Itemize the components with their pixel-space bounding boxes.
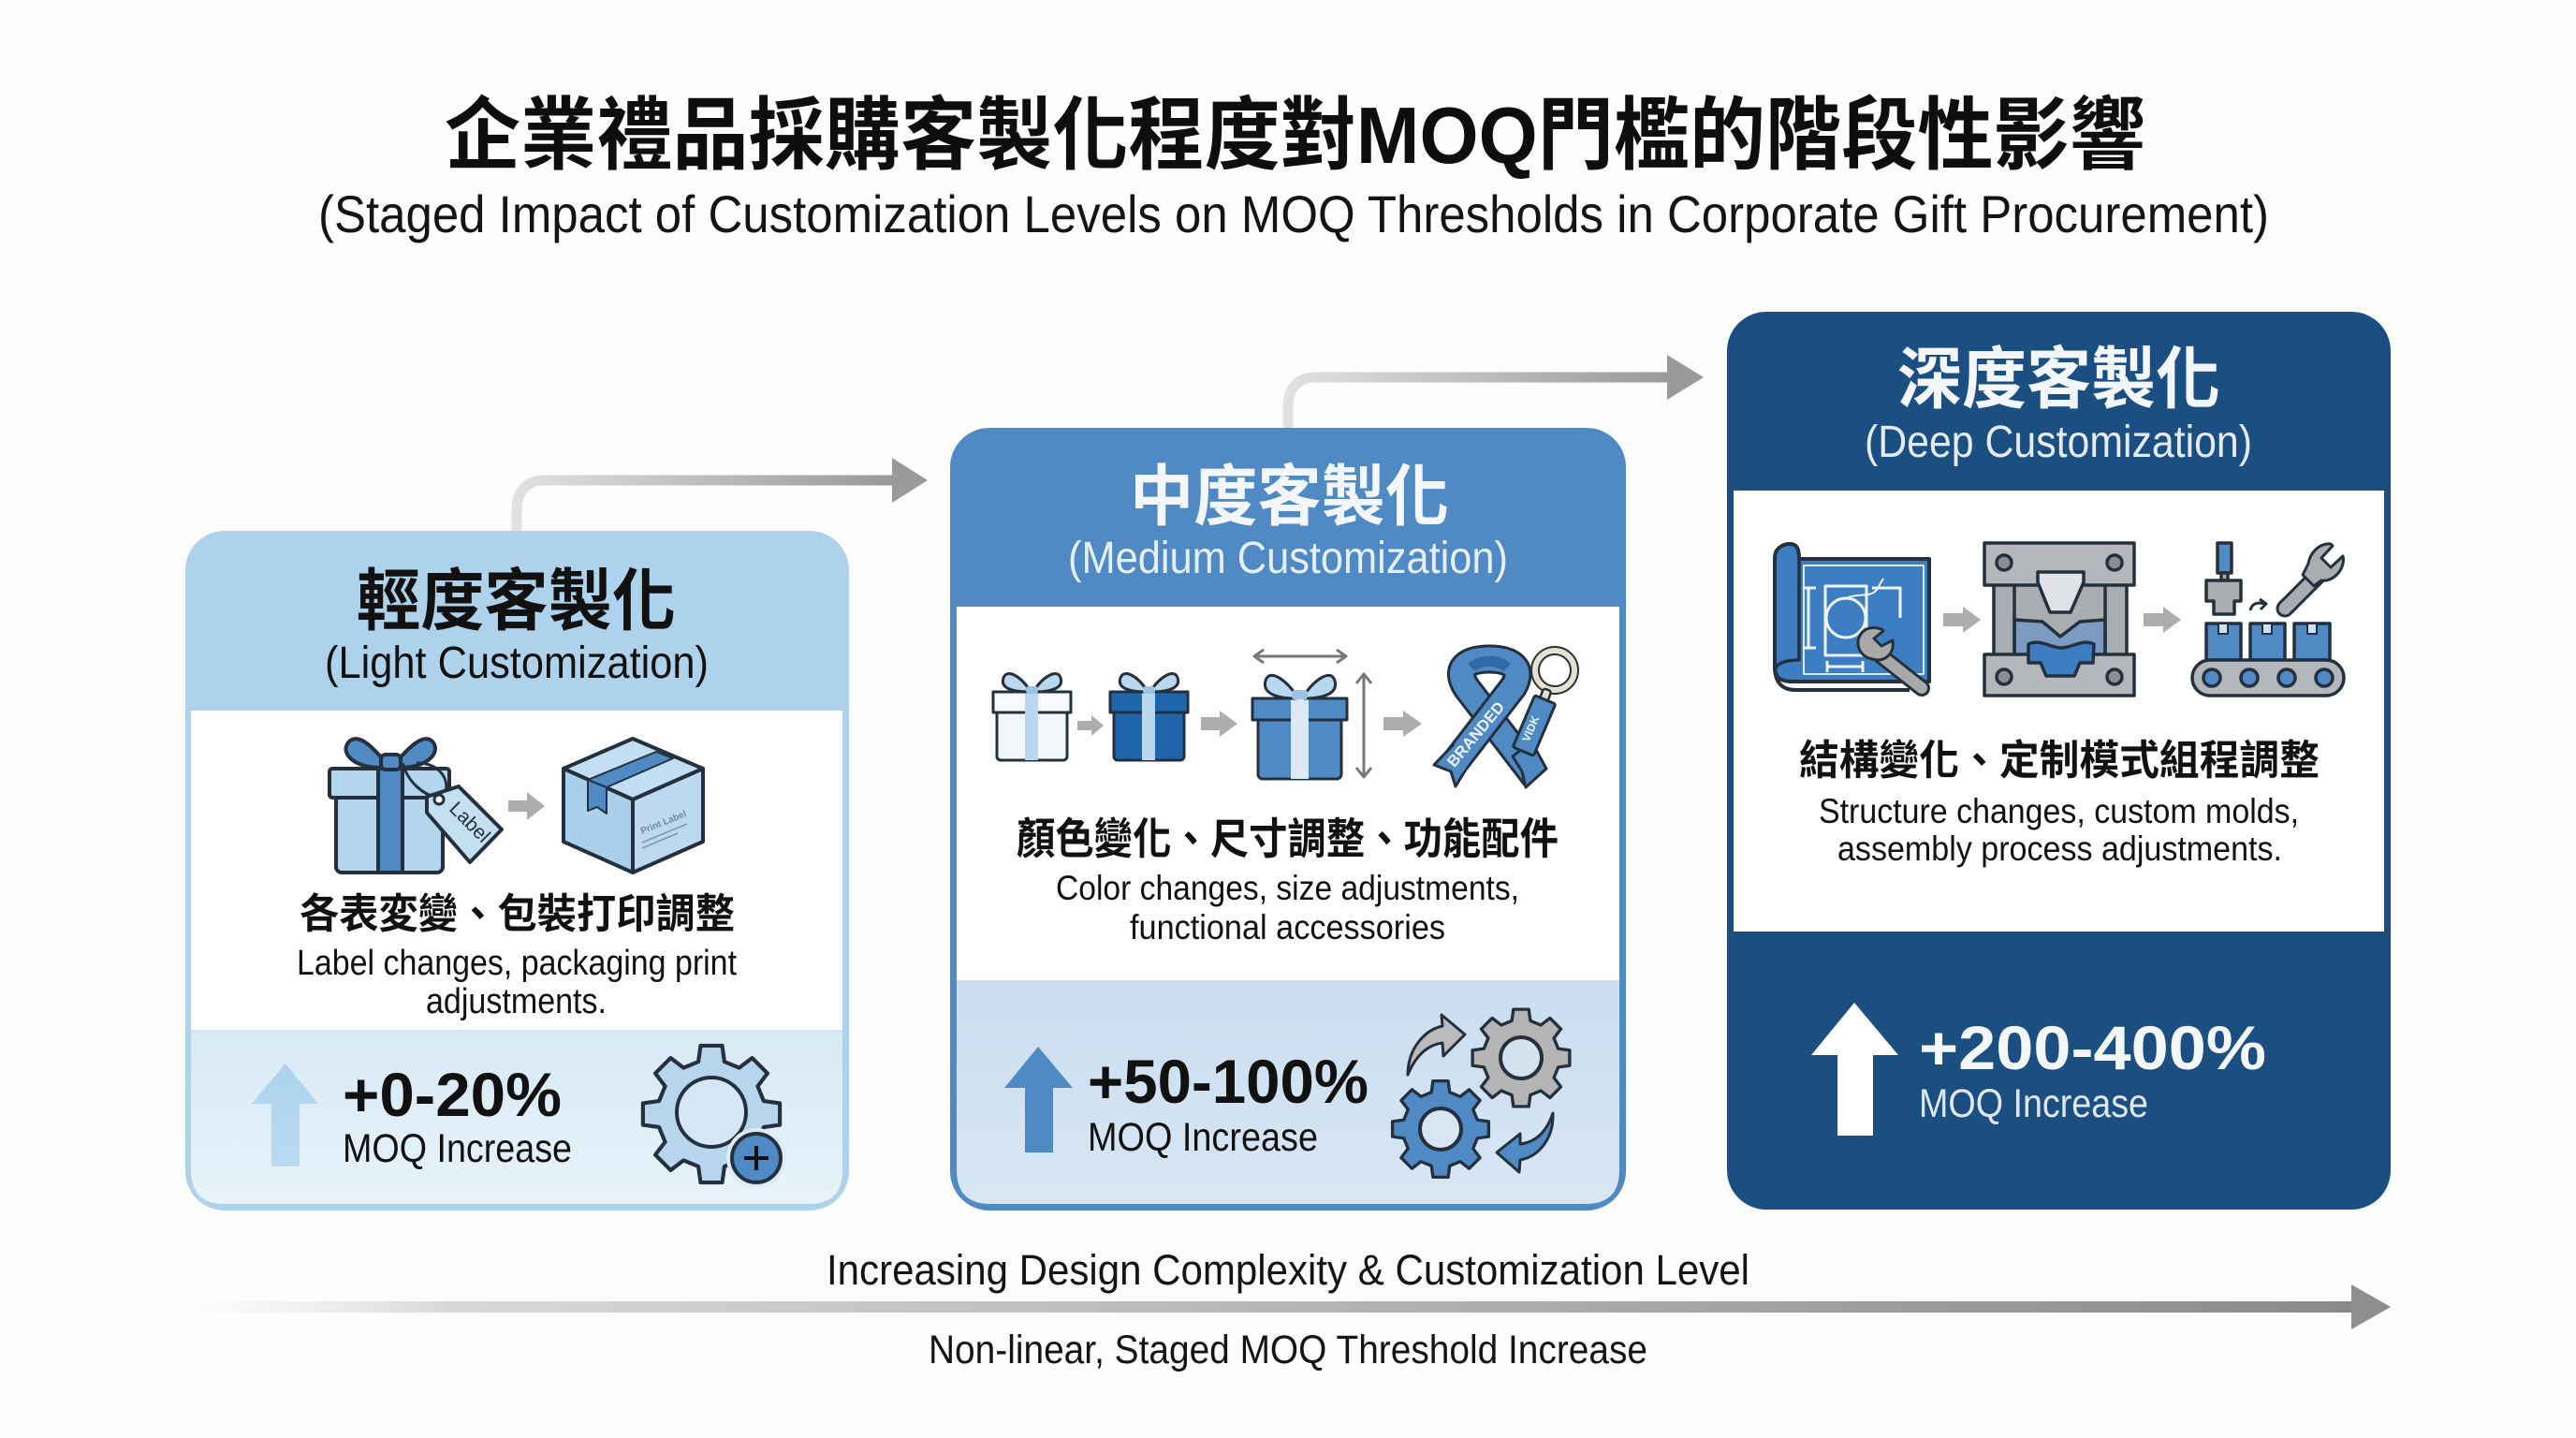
arrow: blue gift to resized gift	[1201, 711, 1237, 737]
text: medium description	[1017, 814, 1559, 946]
text: medium description: 顏色變化、尺寸調整、功能配件	[1017, 814, 1559, 863]
text: light description: adjustments.	[426, 982, 607, 1021]
arrow: medium to deep connector	[1288, 355, 1704, 431]
icon: branded ribbon and key tag: BRANDED	[1443, 698, 1508, 770]
text: deep description: assembly process adjustments.	[1837, 829, 2282, 868]
heading: deep customization: (Deep Customization)	[1865, 418, 2252, 467]
text: medium description: Color changes, size adjustments,	[1056, 869, 1519, 907]
heading: light customization: 輕度客製化	[357, 565, 676, 639]
icon: blueprint and wrench	[1775, 544, 1929, 690]
text: deep description: Structure changes, custom molds,	[1819, 792, 2299, 830]
text: medium description: functional accessories	[1130, 908, 1445, 946]
title: 企業禮品採購客製化程度對MOQ門檻的階段性影響	[445, 92, 2145, 181]
metric: deep MOQ increase	[1919, 1013, 2266, 1126]
icon: up arrow light	[252, 1064, 318, 1167]
panel: deep customization	[1727, 312, 2391, 1210]
icon: branded ribbon and key tag	[1434, 651, 1574, 787]
text: deep description: 結構變化、定制模式組程調整	[1799, 738, 2320, 784]
metric: light MOQ increase	[343, 1060, 572, 1171]
metric: medium MOQ increase	[1088, 1047, 1368, 1160]
arrow: resized gift to accessories	[1383, 711, 1422, 737]
heading: medium customization: (Medium Customization)	[1068, 534, 1508, 583]
arrow: white to blue gift	[1077, 715, 1104, 736]
icon: gear with plus	[643, 1046, 786, 1188]
icon: gift with label tag: Label	[445, 798, 494, 847]
icon: packaging box	[564, 739, 703, 873]
heading: deep customization: 深度客製化	[1897, 343, 2220, 418]
icon: rotating gears	[1393, 1009, 1570, 1177]
text: light description: Label changes, packaging print	[297, 944, 737, 983]
arrow: blueprint to mold	[1943, 607, 1981, 633]
arrow: light to medium connector	[517, 458, 928, 534]
icon: up arrow medium	[1004, 1047, 1073, 1152]
panel: medium customization	[950, 428, 1626, 1211]
icon: packaging box: Print Label	[639, 809, 688, 837]
arrow: gift to box	[508, 792, 545, 820]
text: light description: 各表変變、包裝打印調整	[300, 891, 735, 937]
icon: injection mold	[1984, 543, 2134, 696]
axis label: complexity: Increasing Design Complexity & Customization Level	[827, 1246, 1749, 1294]
icon: assembly conveyor	[2192, 543, 2344, 696]
icon: gift with label tag	[329, 739, 502, 873]
icon: resized gift with dimension arrows	[1252, 650, 1371, 779]
heading: medium customization	[1068, 461, 1508, 583]
axis label: staged increase: Non-linear, Staged MOQ Threshold Increase	[929, 1328, 1647, 1372]
icon: up arrow deep	[1811, 1003, 1898, 1136]
metric: medium MOQ increase: MOQ Increase	[1088, 1115, 1318, 1160]
heading: medium customization: 中度客製化	[1130, 461, 1449, 535]
panel: light customization	[185, 531, 849, 1211]
icon: white gift	[993, 674, 1071, 760]
metric: deep MOQ increase: MOQ Increase	[1919, 1081, 2148, 1126]
heading: deep customization	[1865, 343, 2252, 467]
icon: branded ribbon and key tag: VIDK	[1519, 713, 1542, 743]
arrow: mold to assembly	[2144, 607, 2181, 633]
text: light description	[297, 891, 737, 1021]
metric: medium MOQ increase: +50-100%	[1088, 1047, 1368, 1116]
metric: light MOQ increase: MOQ Increase	[343, 1126, 572, 1171]
subtitle: (Staged Impact of Customization Levels on MOQ Thresholds in Corporate Gift Procurement)	[318, 184, 2269, 243]
text: deep description	[1799, 738, 2320, 868]
icon: blue gift	[1110, 674, 1188, 760]
metric: light MOQ increase: +0-20%	[343, 1060, 562, 1129]
heading: light customization	[325, 565, 709, 688]
arrow: complexity axis	[187, 1284, 2391, 1329]
metric: deep MOQ increase: +200-400%	[1919, 1013, 2266, 1082]
heading: light customization: (Light Customization)	[325, 638, 709, 688]
